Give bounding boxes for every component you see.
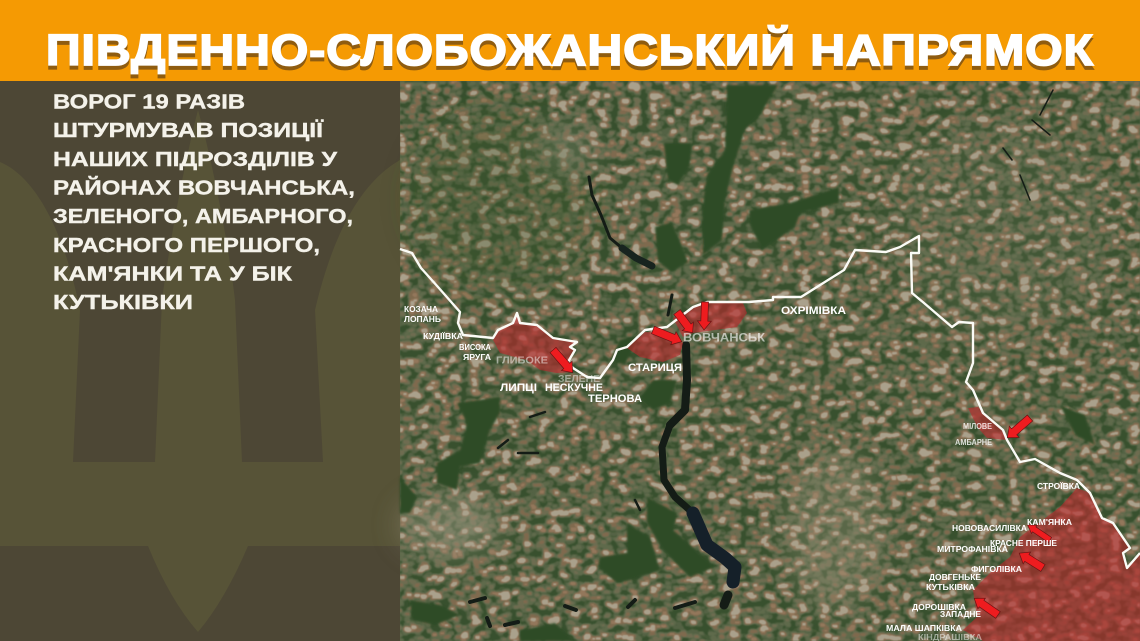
text block: summary: ЗЕЛЕНОГО, АМБАРНОГО, (53, 205, 353, 228)
settlement labels: КОЗАЧА (404, 305, 438, 314)
settlement labels: ОХРІМІВКА (781, 305, 846, 317)
occupied areas (493, 303, 1140, 641)
settlement labels: НЕСКУЧНЕ (545, 382, 603, 394)
settlement labels: КАМ'ЯНКА (1027, 518, 1072, 527)
text block: summary: КРАСНОГО ПЕРШОГО, (53, 234, 320, 257)
panel: left text panel (0, 81, 400, 641)
settlement labels: КРАСНЕ ПЕРШЕ (990, 539, 1058, 548)
settlement labels: ВИСОКА (459, 343, 491, 352)
title: ПІВДЕННО-СЛОБОЖАНСЬКИЙ НАПРЯМОК (46, 28, 1094, 79)
title: ПІВДЕННО-СЛОБОЖАНСЬКИЙ НАПРЯМОК (46, 24, 1094, 75)
settlement labels: КУТЬКІВКА (926, 583, 975, 592)
settlement labels: МІЛОВЕ (963, 422, 993, 431)
settlement labels: ЗЕЛЕНЕ (558, 374, 600, 385)
settlement labels: ДОРОШІВКА (912, 603, 966, 612)
settlement labels: ВОВЧАНСЬК (683, 330, 766, 344)
river and reservoirs (470, 90, 1053, 626)
settlement labels: ТЕРНОВА (588, 393, 642, 405)
front line (400, 236, 1140, 568)
settlement labels: ДОВГЕНЬКЕ (929, 573, 982, 582)
text block: summary: ВОРОГ 19 РАЗІВ (53, 90, 245, 114)
attack arrows (548, 302, 1053, 620)
text block: summary: ШТУРМУВАВ ПОЗИЦІЇ (53, 119, 325, 142)
light farmland and city haze (400, 110, 1110, 610)
settlement labels: ФИГОЛІВКА (971, 565, 1022, 574)
settlement labels: ЛОПАНЬ (404, 315, 441, 324)
trident emblem (0, 110, 400, 632)
settlement labels: АМБАРНЕ (955, 438, 993, 447)
text block: summary: КАМ'ЯНКИ ТА У БІК (53, 262, 293, 286)
text block: summary: РАЙОНАХ ВОВЧАНСЬКА, (53, 176, 355, 200)
settlement labels: СТРОЇВКА (1037, 482, 1080, 491)
settlement labels: ЯРУГА (463, 353, 491, 362)
forests (400, 85, 1095, 641)
settlement labels: СТАРИЦЯ (628, 362, 682, 374)
text block: summary: НАШИХ ПІДРОЗДІЛІВ У (53, 148, 337, 171)
settlement labels: ЗАПАДНЕ (940, 610, 982, 619)
settlement labels: МАЛА ШАПКІВКА (886, 624, 962, 633)
text block: summary (53, 90, 355, 314)
settlement labels: ГЛИБОКЕ (496, 356, 548, 366)
settlement labels: ЛИПЦІ (500, 382, 537, 394)
settlement labels: НОВОВАСИЛІВКА (952, 524, 1027, 533)
panel: title banner (0, 0, 1140, 81)
settlement labels: КУДІЇВКА (423, 332, 463, 341)
settlement labels (404, 305, 1080, 641)
text block: summary: КУТЬКІВКИ (53, 291, 193, 314)
settlement labels: МИТРОФАНІВКА (937, 545, 1008, 554)
panel: satellite map (400, 81, 1140, 641)
